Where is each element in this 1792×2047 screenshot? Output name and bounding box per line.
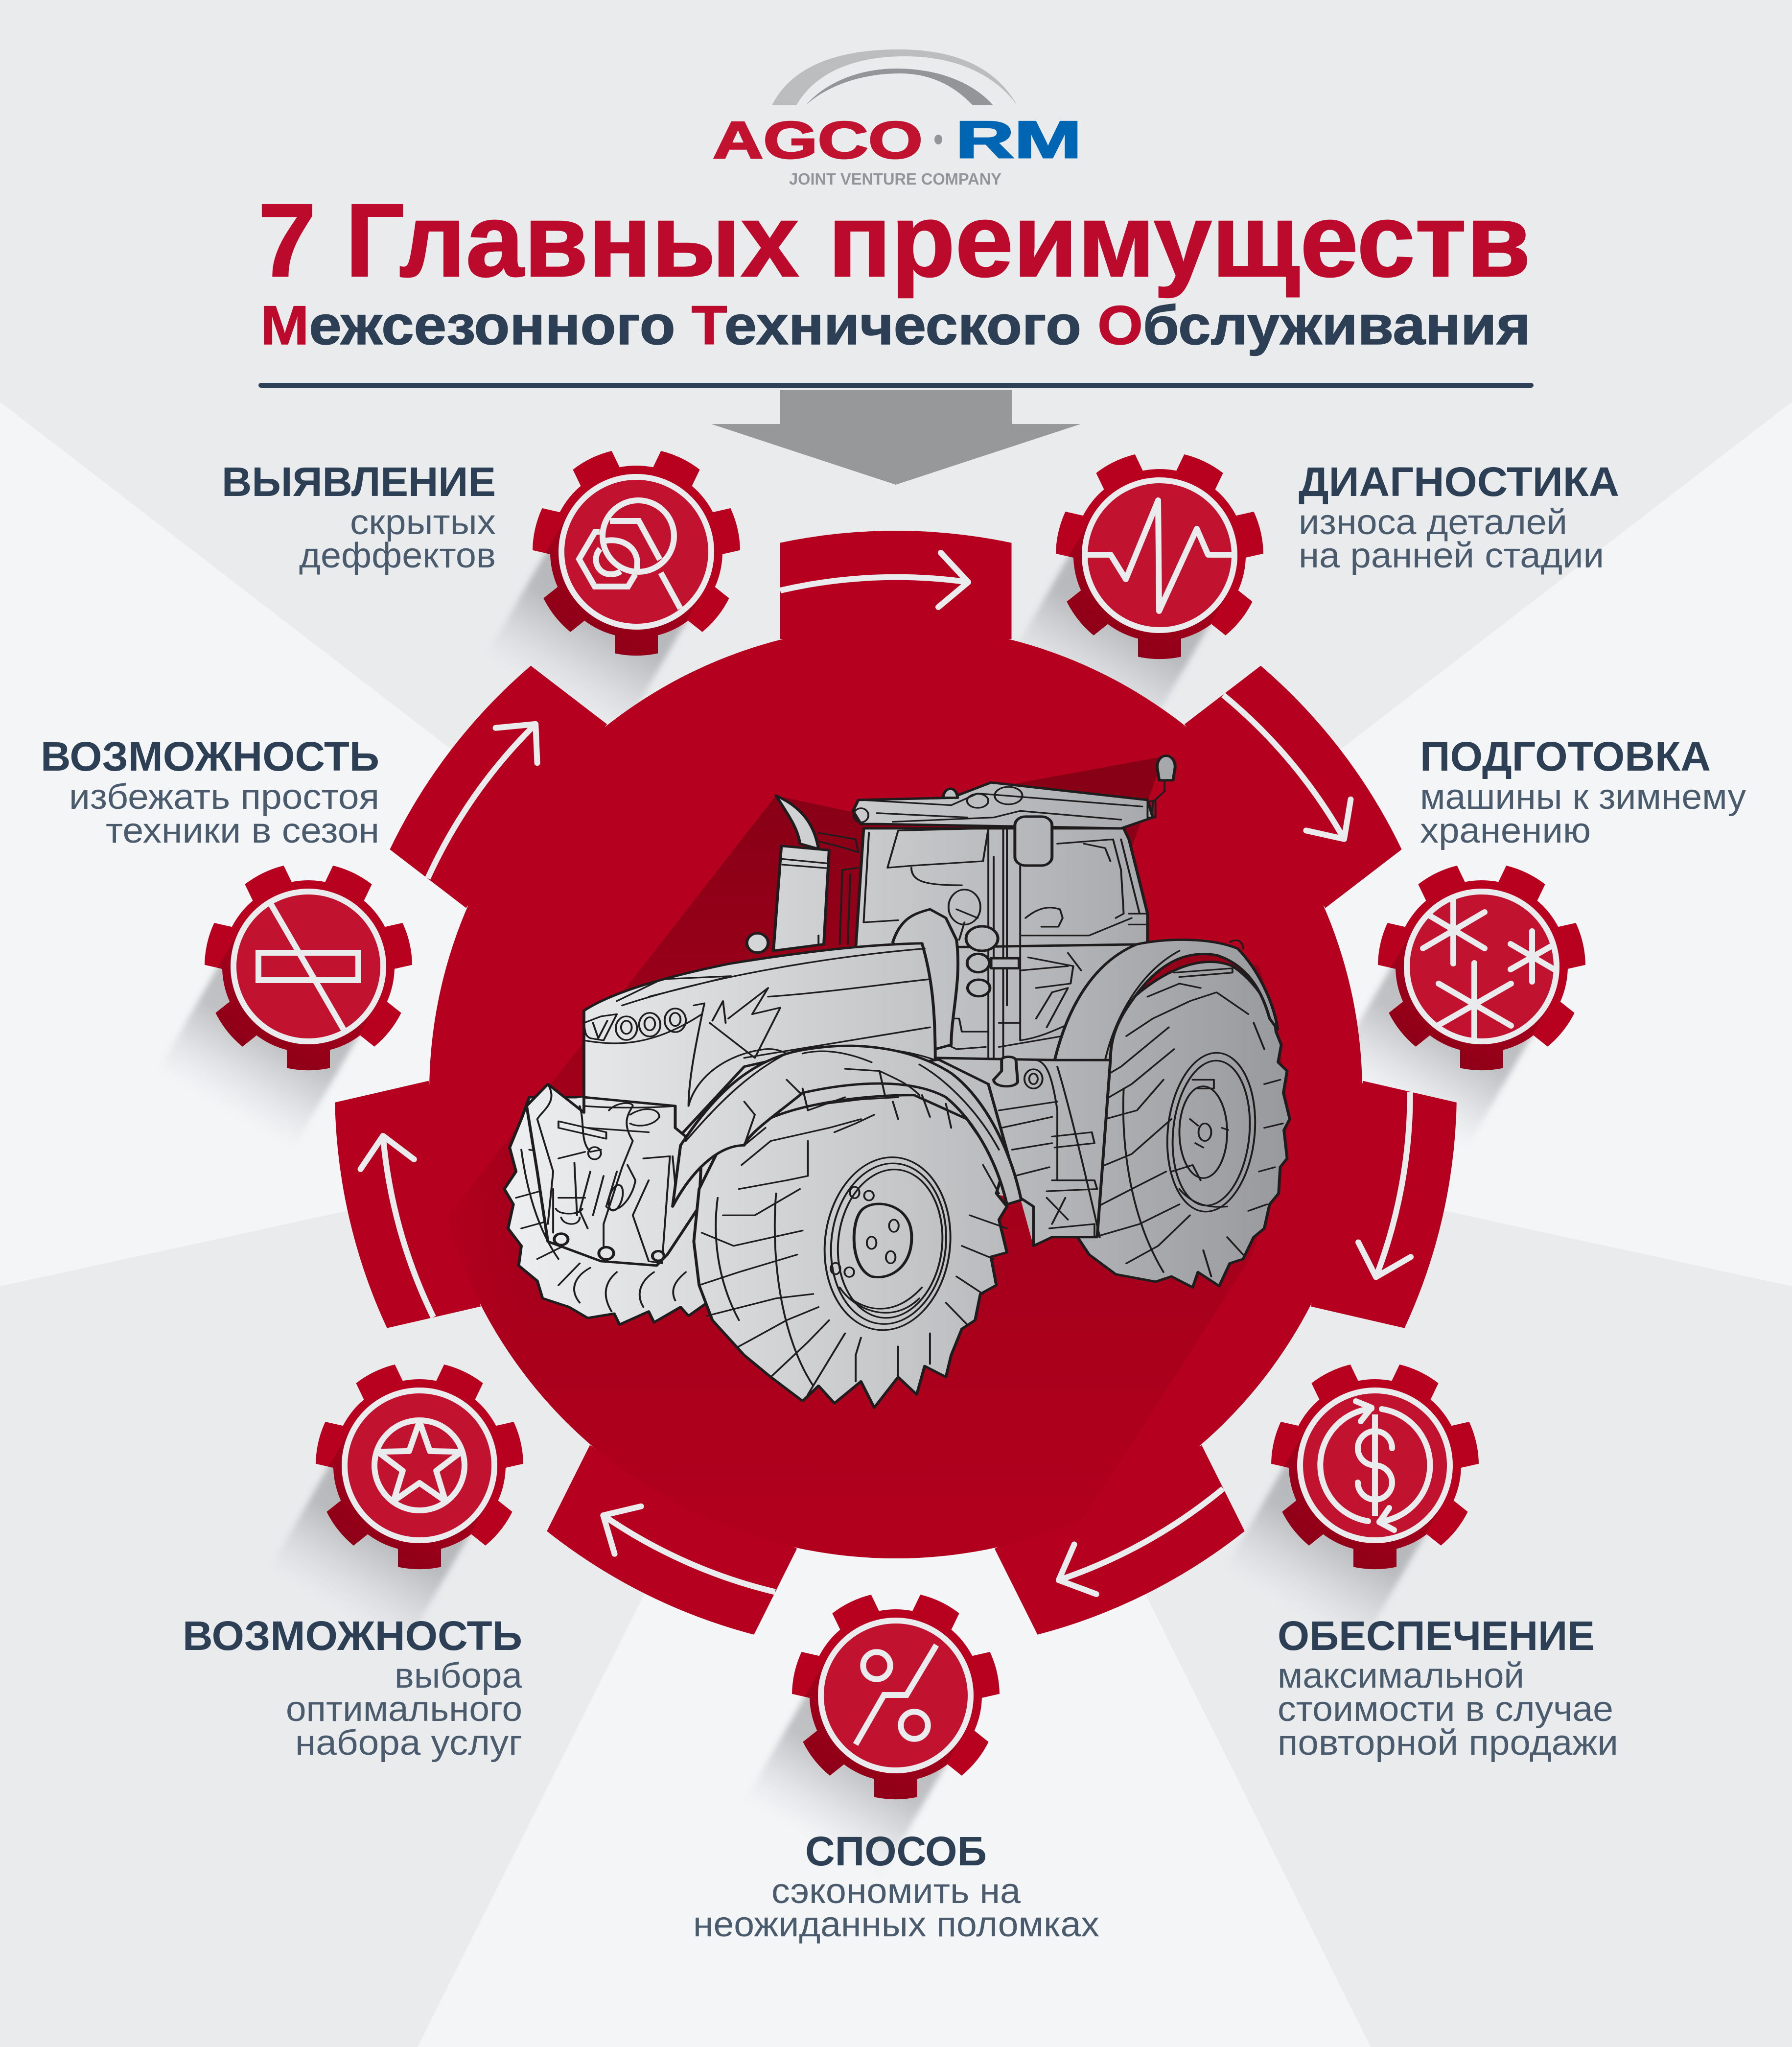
icon: diagnostics pulse — [994, 452, 1265, 764]
tractor illustration — [504, 756, 1290, 1408]
label: preparation: машины к зимнему — [1420, 777, 1746, 817]
label: resale value: стоимости в случае — [1278, 1690, 1613, 1729]
magnifier lens — [603, 500, 674, 572]
exhaust — [747, 796, 859, 953]
label: resale value: повторной продажи — [1278, 1723, 1618, 1763]
label: preparation: ПОДГОТОВКА — [1420, 733, 1711, 779]
stacked work lights — [966, 926, 1019, 996]
icon: hidden defect nut and magnifier — [471, 449, 742, 760]
label: detection — [222, 459, 496, 575]
title rule — [258, 383, 1534, 388]
nut inside lens — [610, 521, 660, 560]
icon: crossed-out downtime bar — [143, 864, 414, 1175]
tractor long shadow — [470, 757, 1288, 1558]
logo: RM — [955, 110, 1082, 169]
label: diagnostics: ДИАГНОСТИКА — [1299, 459, 1619, 505]
label: savings: неожиданных поломках — [693, 1905, 1099, 1944]
label: savings: СПОСОБ — [805, 1828, 987, 1874]
cycle arrows — [354, 553, 1447, 1625]
logo — [713, 49, 1082, 188]
bonnet — [584, 943, 935, 1141]
label: preparation: хранению — [1420, 811, 1591, 850]
label: diagnostics: износа деталей — [1299, 503, 1567, 542]
front wheel — [694, 1095, 1007, 1408]
label: service choice: оптимального — [286, 1690, 522, 1729]
icon: percent — [730, 1593, 1001, 1904]
icon: snowflakes — [1316, 864, 1587, 1175]
label: resale value — [1278, 1613, 1618, 1763]
label: service choice — [183, 1613, 523, 1763]
label: savings — [693, 1828, 1099, 1944]
rear wheel — [1077, 962, 1290, 1288]
label: detection: скрытых — [350, 503, 496, 542]
label: resale value: ОБЕСПЕЧЕНИЕ — [1278, 1613, 1595, 1659]
tractor body underlay — [527, 940, 1147, 1259]
label: service choice: ВОЗМОЖНОСТЬ — [183, 1613, 522, 1659]
icon shadows — [158, 513, 1549, 1879]
magnifier handle — [661, 573, 680, 609]
central gear — [323, 531, 1468, 1646]
label: avoid downtime: техники в сезон — [106, 811, 379, 850]
label: avoid downtime — [41, 733, 379, 850]
subtitle: Межсезонного Технического Обслуживания — [260, 295, 1531, 356]
cab roof — [853, 782, 1153, 828]
far front tyre — [504, 1097, 707, 1324]
logo: JOINT VENTURE COMPANY — [789, 170, 1001, 188]
front fender — [673, 1046, 1021, 1206]
label: avoid downtime: ВОЗМОЖНОСТЬ — [41, 733, 379, 779]
label: savings: сэкономить на — [771, 1872, 1021, 1911]
icon: star in circle — [254, 1363, 525, 1674]
nut hexagon — [579, 532, 635, 587]
rear fender — [1055, 940, 1278, 1062]
mirror — [1015, 817, 1052, 866]
label: diagnostics — [1299, 459, 1619, 575]
label: service choice: выбора — [395, 1656, 523, 1695]
front linkage — [527, 1084, 702, 1266]
cab — [840, 813, 1147, 1062]
mid body and steps — [935, 1057, 1111, 1246]
label: detection: ВЫЯВЛЕНИЕ — [222, 459, 496, 505]
magnified nut hole — [605, 540, 637, 569]
title: 7 Главных преимуществ — [258, 182, 1531, 298]
label: preparation — [1420, 733, 1746, 850]
label: diagnostics: на ранней стадии — [1299, 536, 1604, 575]
logo: AGCO — [713, 111, 923, 169]
nut hole — [596, 549, 621, 574]
grey down arrow — [711, 390, 1081, 485]
label: resale value: максимальной — [1278, 1656, 1524, 1695]
icon: dollar cycle — [1210, 1363, 1481, 1674]
label: avoid downtime: избежать простоя — [69, 777, 379, 817]
beacon — [1147, 756, 1175, 818]
label: detection: деффектов — [299, 536, 496, 575]
label: service choice: набора услуг — [295, 1723, 522, 1763]
